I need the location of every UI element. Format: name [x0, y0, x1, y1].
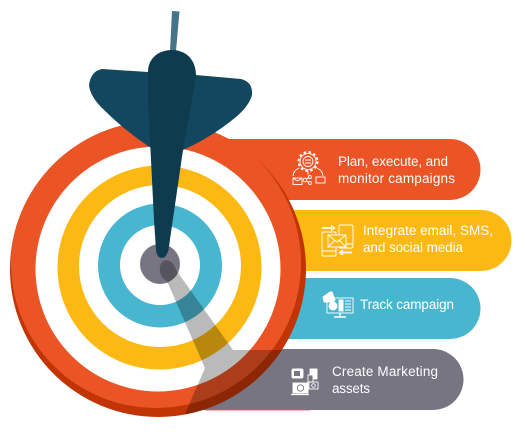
target: white ring inner: [79, 185, 241, 347]
label: track campaign: Track campaign: [360, 297, 454, 312]
label: plan, execute, and monitor campaigns: Plan, execute, and: [338, 154, 448, 169]
target: white centre: [120, 225, 200, 305]
pill: integrate email, SMS, and social media: [200, 210, 511, 271]
label: integrate email, SMS, and social media: and social media: [363, 240, 463, 255]
dart shadow: [160, 260, 282, 414]
target: bullseye: [140, 244, 180, 284]
label: integrate email, SMS, and social media: Integrate email, SMS,: [363, 223, 493, 238]
icon: phones with envelope: [322, 225, 353, 256]
target: yellow ring: [58, 166, 262, 370]
pill: create marketing assets: [190, 349, 463, 410]
target: blue ring: [98, 204, 222, 328]
pill: track campaign: [200, 278, 480, 339]
target: white ring: [36, 146, 280, 392]
dart: body: [148, 50, 196, 258]
dart: wings: [89, 69, 252, 150]
label: create marketing assets: assets: [332, 381, 370, 396]
pill: plan, execute, and monitor campaigns: [200, 139, 480, 200]
dart: [89, 11, 252, 258]
target board: [10, 126, 306, 417]
icon: gear with network: [293, 152, 325, 184]
target: orange ring: [11, 118, 301, 408]
icon: monitor with megaphone: [323, 292, 353, 317]
label: create marketing assets: Create Marketing: [332, 364, 438, 379]
target: dark rim: [10, 121, 306, 417]
icon: media assets: [291, 369, 318, 394]
dart: shaft tail: [170, 11, 180, 51]
label: plan, execute, and monitor campaigns: monitor campaigns: [338, 171, 455, 186]
